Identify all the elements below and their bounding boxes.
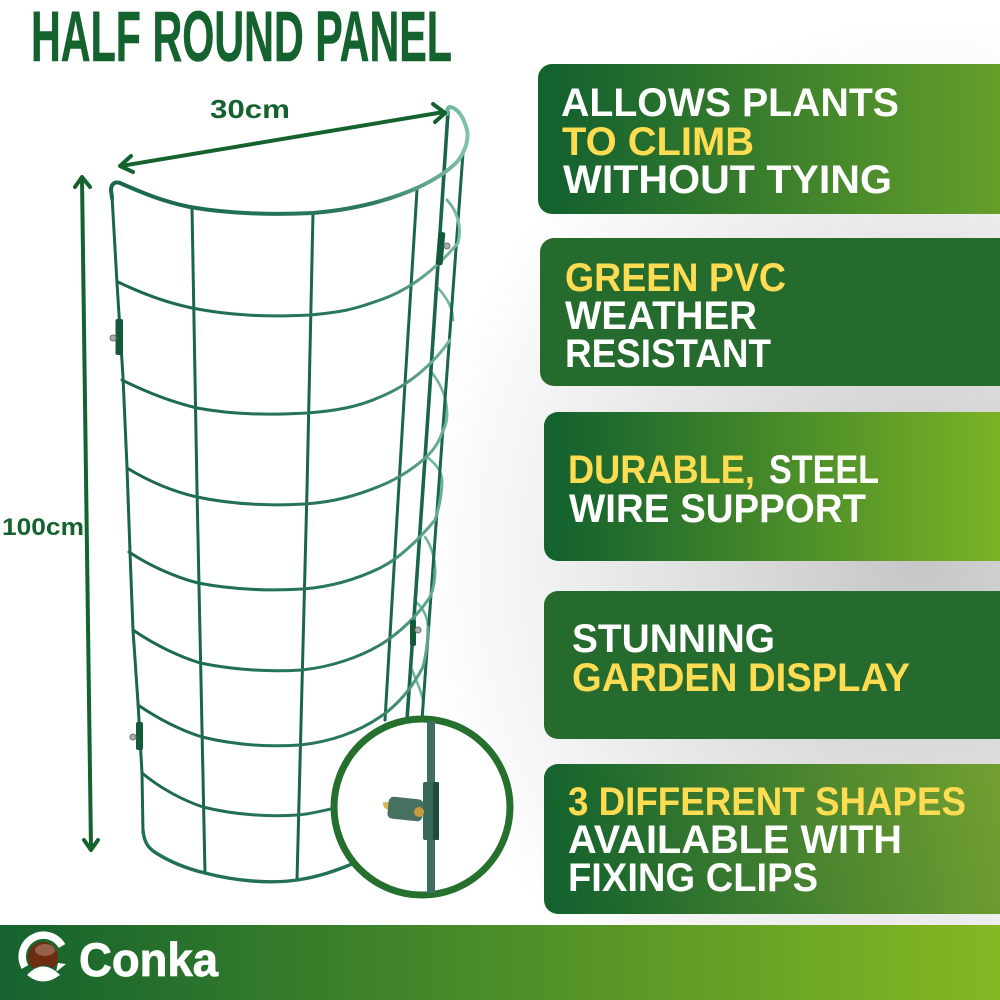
panel: allows plants to climb: ALLOWS PLANTS — [561, 81, 899, 125]
vertical wires — [112, 112, 463, 880]
arrow: 100cm height — [75, 177, 98, 850]
logo wordmark: Conka — [79, 933, 219, 986]
panel: allows plants to climb: TO CLIMB — [562, 120, 754, 164]
panel: 3 different shapes: 3 DIFFERENT SHAPES — [568, 780, 966, 824]
label: 30cm: 30cm — [210, 94, 290, 124]
panel: stunning garden display: GARDEN DISPLAY — [572, 656, 910, 700]
panel: green pvc: GREEN PVC — [565, 256, 786, 300]
back rails — [412, 288, 453, 700]
inset ring — [334, 719, 510, 895]
panel: allows plants to climb: WITHOUT TYING — [563, 158, 892, 202]
inset: clip detail — [334, 719, 510, 895]
panel: 3 different shapes — [544, 764, 1000, 914]
icon: conka logo — [22, 935, 66, 982]
panel: durable — [544, 412, 1000, 561]
panel: 3 different shapes: FIXING CLIPS — [568, 856, 818, 900]
panel: allows plants to climb — [538, 64, 1000, 214]
title: HALF ROUND PANEL — [31, 0, 452, 77]
clips — [116, 232, 445, 750]
panel: green pvc: WEATHER — [565, 294, 757, 338]
clip bolts — [110, 243, 450, 740]
panel: green pvc: RESISTANT — [565, 332, 771, 376]
panel: stunning garden display — [544, 591, 1000, 739]
bottom rail — [143, 830, 352, 882]
panel: durable: STEEL — [769, 448, 879, 492]
top rail — [111, 107, 468, 214]
panel: 3 different shapes: AVAILABLE WITH — [568, 818, 902, 862]
horizontal rails — [118, 200, 460, 816]
label: 100cm: 100cm — [2, 514, 84, 541]
arrow: 30cm width — [120, 104, 445, 172]
panel: durable: WIRE SUPPORT — [569, 487, 866, 531]
inset bolt — [381, 796, 424, 822]
product: half round trellis panel — [110, 107, 468, 882]
footer bar — [0, 925, 1000, 1000]
panel: durable: DURABLE, — [568, 448, 755, 492]
inset clip — [423, 782, 439, 840]
inset rod — [427, 721, 435, 893]
panel: green pvc — [540, 238, 1000, 386]
panel: stunning garden display: STUNNING — [572, 617, 775, 661]
